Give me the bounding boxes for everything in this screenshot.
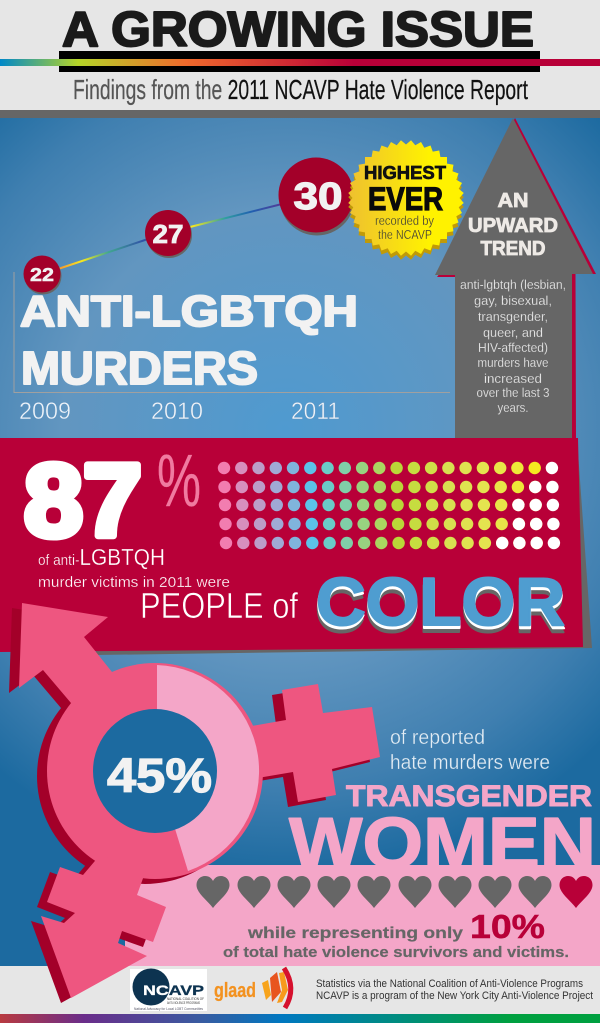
transgender symbol <box>9 603 380 1003</box>
chart heading: MURDERS <box>21 342 258 394</box>
badge: highest ever: recorded by <box>375 213 434 228</box>
logo: NCAVP: NATIONAL COALITION OF <box>167 997 204 1001</box>
heading: transgender: TRANSGENDER <box>346 780 592 813</box>
heading: people of: PEOPLE of <box>140 585 299 626</box>
dot matrix <box>218 462 560 549</box>
arrow description: queer, and <box>483 325 543 340</box>
hearts: one in ten <box>196 876 592 908</box>
statistic: 87 percent <box>24 439 201 558</box>
statistic: 45 percent: 45% <box>107 750 212 803</box>
caption: murder victims <box>38 544 230 591</box>
caption: reported hate murders: hate murders were <box>390 752 550 774</box>
logo: glaad <box>214 968 291 1008</box>
statistic: 10 percent: 10% <box>470 908 545 945</box>
pink ring segment <box>157 665 259 871</box>
logo: NCAVP: National Advocacy for Local LGBT Communities <box>134 1007 203 1011</box>
heading: color: COLOR <box>316 567 566 643</box>
source credits <box>316 978 593 1002</box>
data point 2011: 30 <box>294 176 342 218</box>
arrow heading <box>468 190 558 260</box>
chart heading: ANTI-LGBTQH <box>20 287 358 336</box>
data point 2009 <box>24 256 62 294</box>
arrow description: transgender, <box>478 309 548 324</box>
year labels: 2010 <box>151 398 203 425</box>
chart heading <box>20 287 358 394</box>
caption: reported hate murders <box>390 727 550 774</box>
chart axis <box>14 272 450 392</box>
gray band <box>0 110 600 118</box>
data point 2010: 27 <box>152 219 184 249</box>
year labels: 2009 <box>19 398 71 425</box>
arrow description: increased <box>484 371 542 386</box>
caption: reported hate murders: of reported <box>390 727 485 749</box>
arrow: upward trend <box>435 118 593 438</box>
trend line <box>58 204 282 269</box>
year labels <box>19 398 340 425</box>
header background <box>0 1 600 110</box>
arrow description <box>460 277 566 415</box>
caption: murder victims: of anti-LGBTQH <box>38 544 165 570</box>
caption: representing only: while representing only <box>247 925 463 942</box>
arrow description: over the last 3 <box>476 385 550 400</box>
data point 2011 <box>278 158 354 236</box>
arrow description: gay, bisexual, <box>474 293 552 308</box>
arrow heading: TREND <box>480 238 546 260</box>
logo: NCAVP: ANTI-VIOLENCE PROGRAMS <box>167 1001 200 1005</box>
logo: glaad: glaad <box>214 980 256 1002</box>
heading: color: COLOR <box>315 571 565 647</box>
badge: highest ever <box>346 138 466 262</box>
caption: murder victims: murder victims in 2011 were <box>38 574 230 591</box>
badge: highest ever: the NCAVP <box>378 227 432 242</box>
panel: people of color band <box>0 438 583 652</box>
logo: NCAVP: NC AVP <box>143 982 204 998</box>
heading: women: WOMEN <box>289 804 596 884</box>
arrow description: anti-lgbtqh (lesbian, <box>460 277 566 292</box>
data point 2010 <box>145 210 192 258</box>
panel shadow <box>96 438 592 655</box>
title: A GROWING ISSUE <box>62 3 534 57</box>
arrow description: years. <box>498 400 528 415</box>
arrow heading: AN <box>498 190 528 212</box>
heading: color: COLOR <box>316 564 565 640</box>
badge: highest ever: EVER <box>368 181 443 217</box>
logo: NCAVP <box>130 968 207 1011</box>
year labels: 2011 <box>291 398 340 425</box>
footer background <box>0 966 600 1014</box>
arrow description: murders have <box>478 355 548 370</box>
bottom rainbow strip <box>0 1014 600 1023</box>
statistic: 87 percent: 87 <box>24 443 142 558</box>
data point 2009: 22 <box>30 265 54 285</box>
center disc <box>93 709 217 833</box>
statistic: 87 percent: % <box>157 439 201 522</box>
panel: murders chart <box>14 158 450 425</box>
arrow heading: UPWARD <box>468 215 558 237</box>
arrow shadow <box>437 118 596 442</box>
badge: highest ever: HIGHEST <box>364 163 446 183</box>
arrow description: HIV-affected) <box>478 340 548 355</box>
rainbow strip <box>0 59 600 66</box>
caption: total survivors: of total hate violence survivors and victims. <box>223 944 569 961</box>
panel: light pink base <box>125 865 600 966</box>
title bar <box>59 51 540 72</box>
